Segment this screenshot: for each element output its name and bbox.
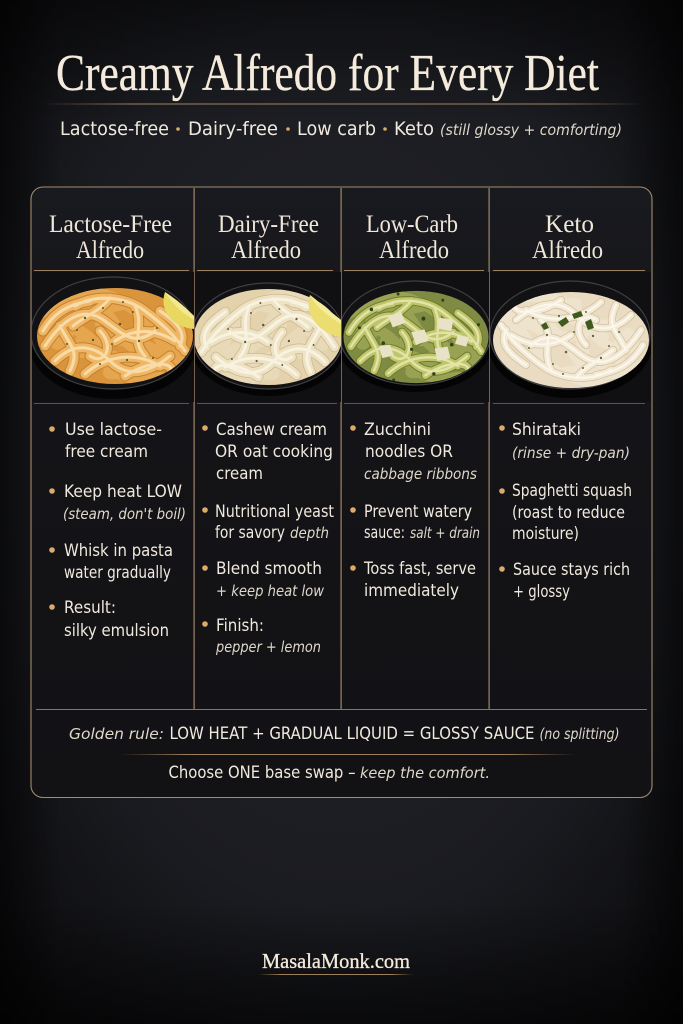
column 1: lactose-free bbox=[27, 211, 199, 641]
bullet list: dairy-free: for savory bbox=[215, 523, 285, 543]
image: shirataki plate bbox=[490, 272, 651, 398]
bullet list: dairy-free: Blend smooth bbox=[216, 559, 322, 579]
bullet list: keto: moisture) bbox=[512, 524, 579, 544]
subtitle: Lactose-free bbox=[60, 118, 169, 140]
panel: diet comparison bbox=[27, 187, 659, 798]
bullet list: low-carb: Prevent watery bbox=[364, 502, 472, 522]
bullet list: low-carb: immediately bbox=[364, 581, 459, 601]
column 3: low-carb bbox=[334, 211, 494, 601]
bullet list: keto: Shirataki bbox=[512, 420, 581, 440]
bullet list: keto: + glossy bbox=[513, 582, 570, 602]
subtitle bbox=[60, 118, 622, 140]
column 4: keto bbox=[487, 211, 659, 602]
heading: dairy-free alfredo: Alfredo bbox=[231, 237, 301, 264]
bullet list: lactose-free: Use lactose- bbox=[65, 420, 162, 440]
bullet list: keto: (roast to reduce bbox=[512, 503, 625, 523]
bullet list: dairy-free bbox=[202, 420, 334, 656]
bullet list: dairy-free: OR oat cooking bbox=[215, 442, 333, 462]
subtitle: Dairy-free bbox=[188, 118, 278, 140]
bullet list: lactose-free: water gradually bbox=[64, 563, 171, 583]
heading: keto alfredo: Alfredo bbox=[532, 237, 603, 264]
image: orange fettuccine plate with lemon bbox=[27, 272, 199, 403]
bullet list: lactose-free: silky emulsion bbox=[64, 621, 169, 641]
heading: lactose-free alfredo bbox=[49, 211, 172, 264]
image: zucchini noodle plate bbox=[334, 272, 494, 402]
bullet list: low-carb: Zucchini bbox=[364, 420, 431, 440]
bullet list: lactose-free: Whisk in pasta bbox=[64, 541, 173, 561]
bullet list: dairy-free: + keep heat low bbox=[216, 582, 324, 600]
footer: website: MasalaMonk.com bbox=[262, 949, 410, 973]
heading: low-carb alfredo bbox=[366, 211, 458, 264]
bullet list: keto: (rinse + dry-pan) bbox=[512, 444, 630, 462]
image: cream fettuccine plate with lemon bbox=[195, 272, 341, 402]
heading: dairy-free alfredo: Dairy-Free bbox=[218, 211, 319, 238]
bullet list: keto: Spaghetti squash bbox=[512, 481, 632, 501]
heading: keto alfredo: Keto bbox=[545, 211, 594, 238]
closing line bbox=[168, 763, 490, 783]
closing line: keep the comfort. bbox=[360, 764, 490, 782]
bullet list: lactose-free: (steam, don't boil) bbox=[63, 505, 186, 523]
bullet list: low-carb: sauce: bbox=[364, 523, 405, 543]
heading: low-carb alfredo: Low-Carb bbox=[366, 211, 458, 238]
bullet list: dairy-free: Nutritional yeast bbox=[215, 502, 334, 522]
bullet list: dairy-free: cream bbox=[216, 464, 263, 484]
bullet list: dairy-free: pepper + lemon bbox=[215, 638, 321, 656]
bullet list: dairy-free: Cashew cream bbox=[216, 420, 327, 440]
bullet list: lactose-free bbox=[49, 420, 186, 641]
bullet list: keto bbox=[499, 420, 632, 602]
column 2: dairy-free bbox=[195, 216, 341, 655]
subtitle: Keto bbox=[394, 118, 434, 140]
bullet list: dairy-free: Finish: bbox=[216, 616, 264, 636]
bullet list: low-carb: cabbage ribbons bbox=[364, 465, 477, 483]
golden rule: (no splitting) bbox=[540, 725, 620, 743]
bullet list: low-carb: Toss fast, serve bbox=[363, 559, 476, 579]
heading: lactose-free alfredo: Alfredo bbox=[76, 237, 144, 264]
heading: dairy-free alfredo bbox=[218, 211, 319, 264]
subtitle: (still glossy + comforting) bbox=[440, 121, 622, 139]
bullet list: keto: Sauce stays rich bbox=[513, 560, 630, 580]
subtitle: Low carb bbox=[297, 118, 376, 140]
bullet list: lactose-free: Keep heat LOW bbox=[64, 482, 182, 502]
golden rule: Golden rule: bbox=[69, 725, 164, 743]
closing line: Choose ONE base swap – bbox=[168, 763, 356, 783]
bullet list: low-carb: salt + drain bbox=[410, 524, 480, 542]
bullet list: dairy-free: depth bbox=[290, 524, 329, 542]
heading: lactose-free alfredo: Lactose-Free bbox=[49, 211, 172, 238]
bullet list: lactose-free: Result: bbox=[64, 598, 116, 618]
heading: low-carb alfredo: Alfredo bbox=[379, 237, 449, 264]
heading: keto alfredo bbox=[532, 211, 603, 264]
golden rule: LOW HEAT + GRADUAL LIQUID = GLOSSY SAUCE bbox=[170, 724, 534, 744]
bullet list: low-carb: noodles OR bbox=[365, 442, 453, 462]
bullet list: lactose-free: free cream bbox=[65, 442, 148, 462]
bullet list: low-carb bbox=[350, 420, 480, 601]
